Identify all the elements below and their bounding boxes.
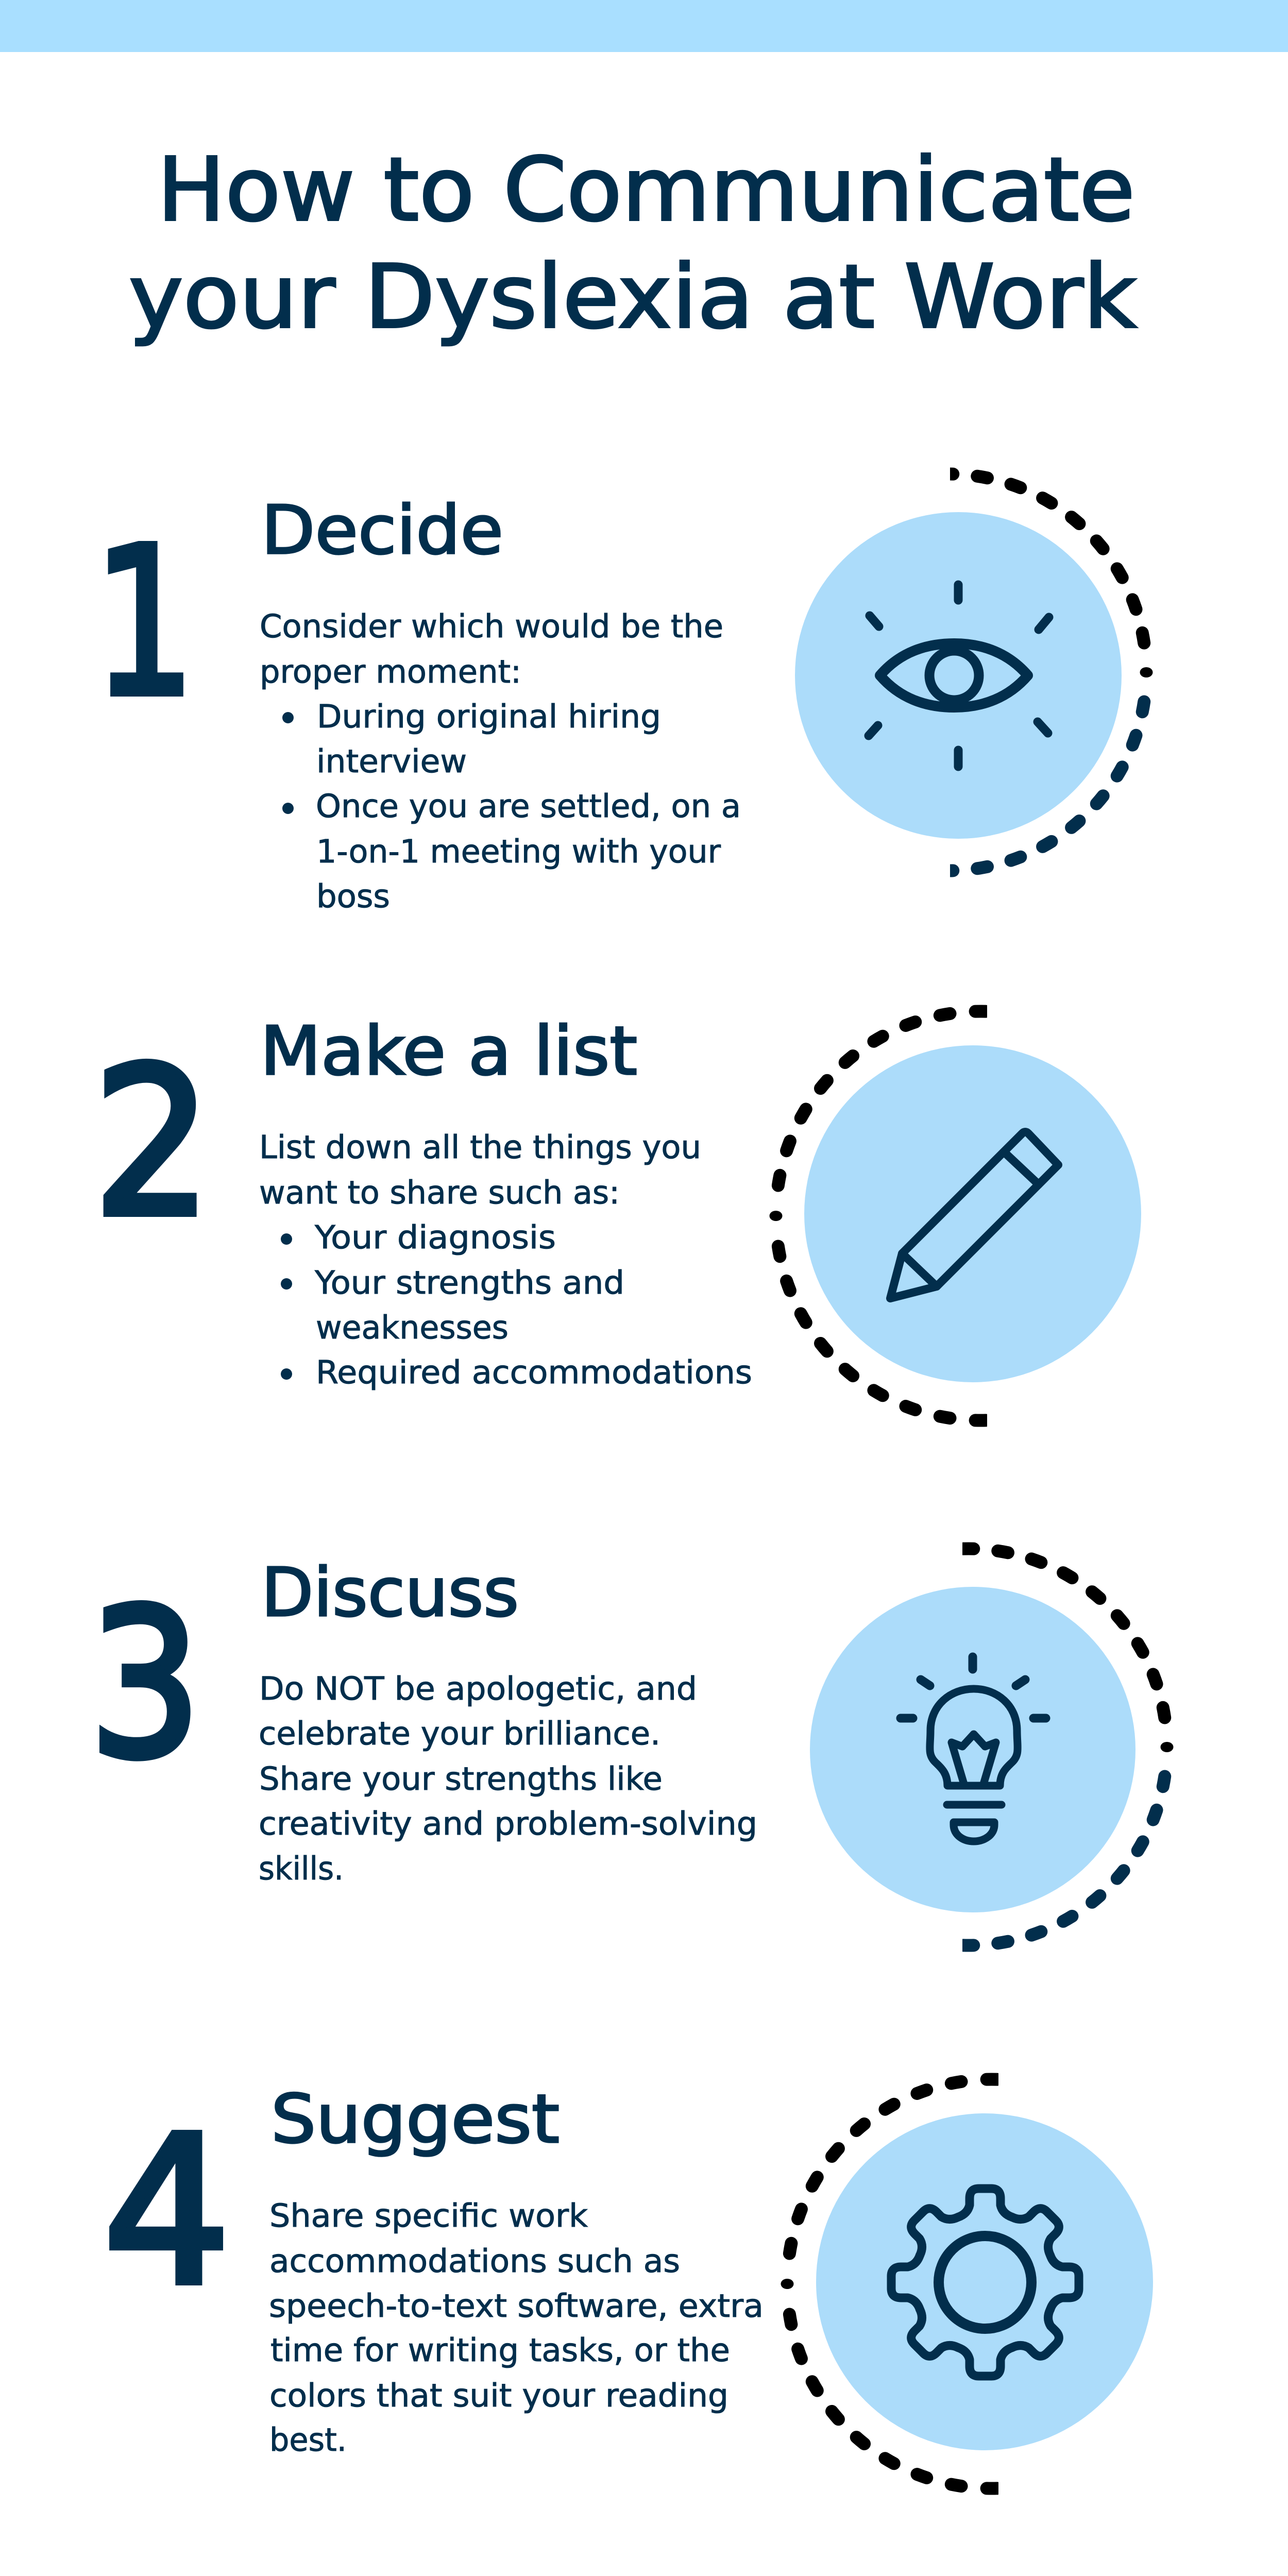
body text: Make a list: Your strengths and xyxy=(314,1264,624,1301)
number 3: 3 xyxy=(89,1566,201,1803)
icon: eye xyxy=(869,585,1049,767)
icon: light bulb xyxy=(901,1657,1046,1841)
body text: Decide: Once you are settled, on a xyxy=(316,787,741,825)
step 3: Discuss xyxy=(89,1549,1174,1945)
circle with dashed arc and eye icon xyxy=(795,474,1153,871)
step 2: Make a list xyxy=(93,1011,1141,1420)
body text: Make a list: Required accommodations xyxy=(316,1353,752,1391)
number 2: 2 xyxy=(93,1025,212,1262)
body text: Suggest xyxy=(269,2197,764,2459)
body text: Make a list xyxy=(259,1128,752,1391)
circle with dashed arc and light bulb icon xyxy=(810,1549,1174,1945)
body text: Suggest: speech-to-text software, extra xyxy=(269,2287,764,2325)
heading: Discuss: Discuss xyxy=(261,1553,519,1632)
number 1: 1 xyxy=(93,504,195,741)
body text: Decide: proper moment: xyxy=(260,653,521,690)
icon: gear xyxy=(891,2189,1079,2376)
heading: Make a list: Make a list xyxy=(260,1012,637,1090)
body text: Make a list: Your diagnosis xyxy=(314,1218,556,1256)
body text: Decide: boss xyxy=(316,877,390,915)
body text: Make a list: List down all the things you xyxy=(259,1128,701,1166)
top bar xyxy=(0,0,1288,52)
title xyxy=(129,139,1137,348)
heading: Decide: Decide xyxy=(261,491,503,569)
body text: Discuss: Do NOT be apologetic, and xyxy=(259,1670,697,1707)
title: your Dyslexia at Work xyxy=(129,246,1137,348)
icon: pencil xyxy=(890,1132,1058,1298)
body text: Discuss: celebrate your brilliance. xyxy=(259,1715,660,1752)
number 4: 4 xyxy=(103,2093,231,2330)
heading: Suggest: Suggest xyxy=(271,2080,560,2158)
circle with dashed arc and pencil icon xyxy=(770,1011,1141,1420)
body text: Make a list: weaknesses xyxy=(316,1309,509,1346)
body text: Discuss: Share your strengths like xyxy=(259,1760,663,1798)
title: How to Communicate xyxy=(157,139,1135,241)
body text: Decide: 1-on-1 meeting with your xyxy=(316,833,721,870)
body text: Decide xyxy=(260,607,741,915)
body text: Make a list: want to share such as: xyxy=(259,1174,620,1211)
body text: Discuss xyxy=(259,1670,757,1887)
body text: Decide: During original hiring xyxy=(317,698,661,735)
body text: Decide: interview xyxy=(316,742,467,780)
body text: Suggest: colors that suit your reading xyxy=(269,2377,728,2414)
body text: Suggest: best. xyxy=(269,2421,347,2459)
body text: Suggest: Share specific work xyxy=(269,2197,588,2234)
body text: Suggest: time for writing tasks, or the xyxy=(270,2331,730,2369)
body text: Discuss: skills. xyxy=(259,1850,344,1887)
circle with dashed arc and gear icon xyxy=(781,2079,1153,2488)
body text: Decide: Consider which would be the xyxy=(260,607,723,645)
body text: Discuss: creativity and problem-solving xyxy=(259,1805,757,1842)
body text: Suggest: accommodations such as xyxy=(269,2242,680,2280)
step 4: Suggest xyxy=(103,2079,1153,2488)
step 1: Decide xyxy=(93,474,1153,915)
